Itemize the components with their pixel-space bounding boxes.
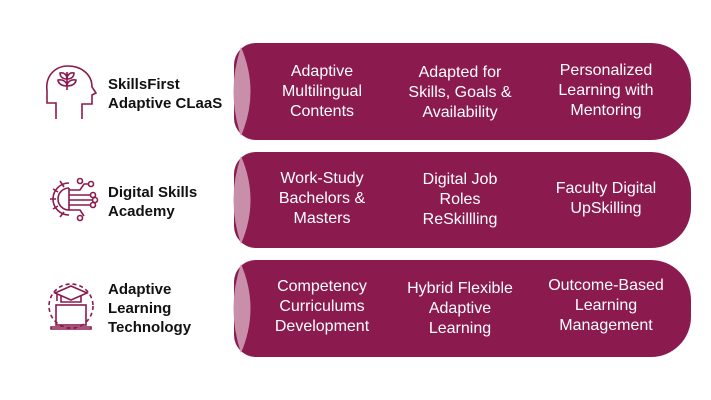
cell xyxy=(275,278,370,335)
cell: Management xyxy=(559,317,653,334)
cell xyxy=(558,62,654,119)
icon: head with plant xyxy=(47,66,96,119)
cell: Roles xyxy=(440,191,480,208)
cell: Adaptive xyxy=(429,300,491,317)
label: Digital Skills xyxy=(108,184,197,220)
cell: Learning with xyxy=(558,82,654,99)
bar 1 xyxy=(234,43,691,140)
cell: Masters xyxy=(294,210,350,227)
cell xyxy=(282,63,362,120)
label: Adaptive Learning: Technology xyxy=(108,319,191,336)
cell xyxy=(556,180,656,217)
cell: Contents xyxy=(290,103,354,120)
cell: Development xyxy=(275,318,369,335)
cell: Mentoring xyxy=(570,102,642,119)
label: Adaptive Learning: Adaptive xyxy=(108,281,171,298)
cell xyxy=(408,64,512,121)
cell: Skills, Goals & xyxy=(408,84,512,101)
cell: Adaptive xyxy=(291,63,353,80)
label: Digital Skills: Academy xyxy=(108,203,175,220)
cell: Faculty Digital xyxy=(556,180,656,197)
cell xyxy=(407,280,513,337)
cell xyxy=(423,171,497,228)
label: SkillsFirst: SkillsFirst xyxy=(108,76,180,93)
label: Digital Skills: Digital Skills xyxy=(108,184,197,201)
cell: Adapted for xyxy=(419,64,501,81)
cell: UpSkilling xyxy=(570,200,642,217)
cell: Curriculums xyxy=(279,298,365,315)
cell: ReSkillling xyxy=(423,211,497,228)
bar 2 xyxy=(234,152,691,248)
icon: gear circuit xyxy=(50,178,98,220)
label: SkillsFirst xyxy=(108,76,222,112)
bar 3 xyxy=(234,260,691,357)
label: Adaptive Learning xyxy=(108,281,191,336)
cell: Availability xyxy=(422,104,498,121)
cell: Hybrid Flexible xyxy=(407,280,513,297)
label: SkillsFirst: Adaptive CLaaS xyxy=(108,95,222,112)
cell: Learning xyxy=(575,297,637,314)
icon: laptop with cap xyxy=(49,284,93,329)
cell: Digital Job xyxy=(423,171,497,188)
cell: Bachelors & xyxy=(279,190,365,207)
cell xyxy=(548,277,664,334)
cell: Learning xyxy=(429,320,491,337)
cell: Personalized xyxy=(560,62,652,79)
cell xyxy=(279,170,365,227)
cell: Work-Study xyxy=(280,170,364,187)
label: Adaptive Learning: Learning xyxy=(108,300,171,317)
cell: Multilingual xyxy=(282,83,362,100)
cell: Competency xyxy=(277,278,367,295)
cell: Outcome-Based xyxy=(548,277,664,294)
